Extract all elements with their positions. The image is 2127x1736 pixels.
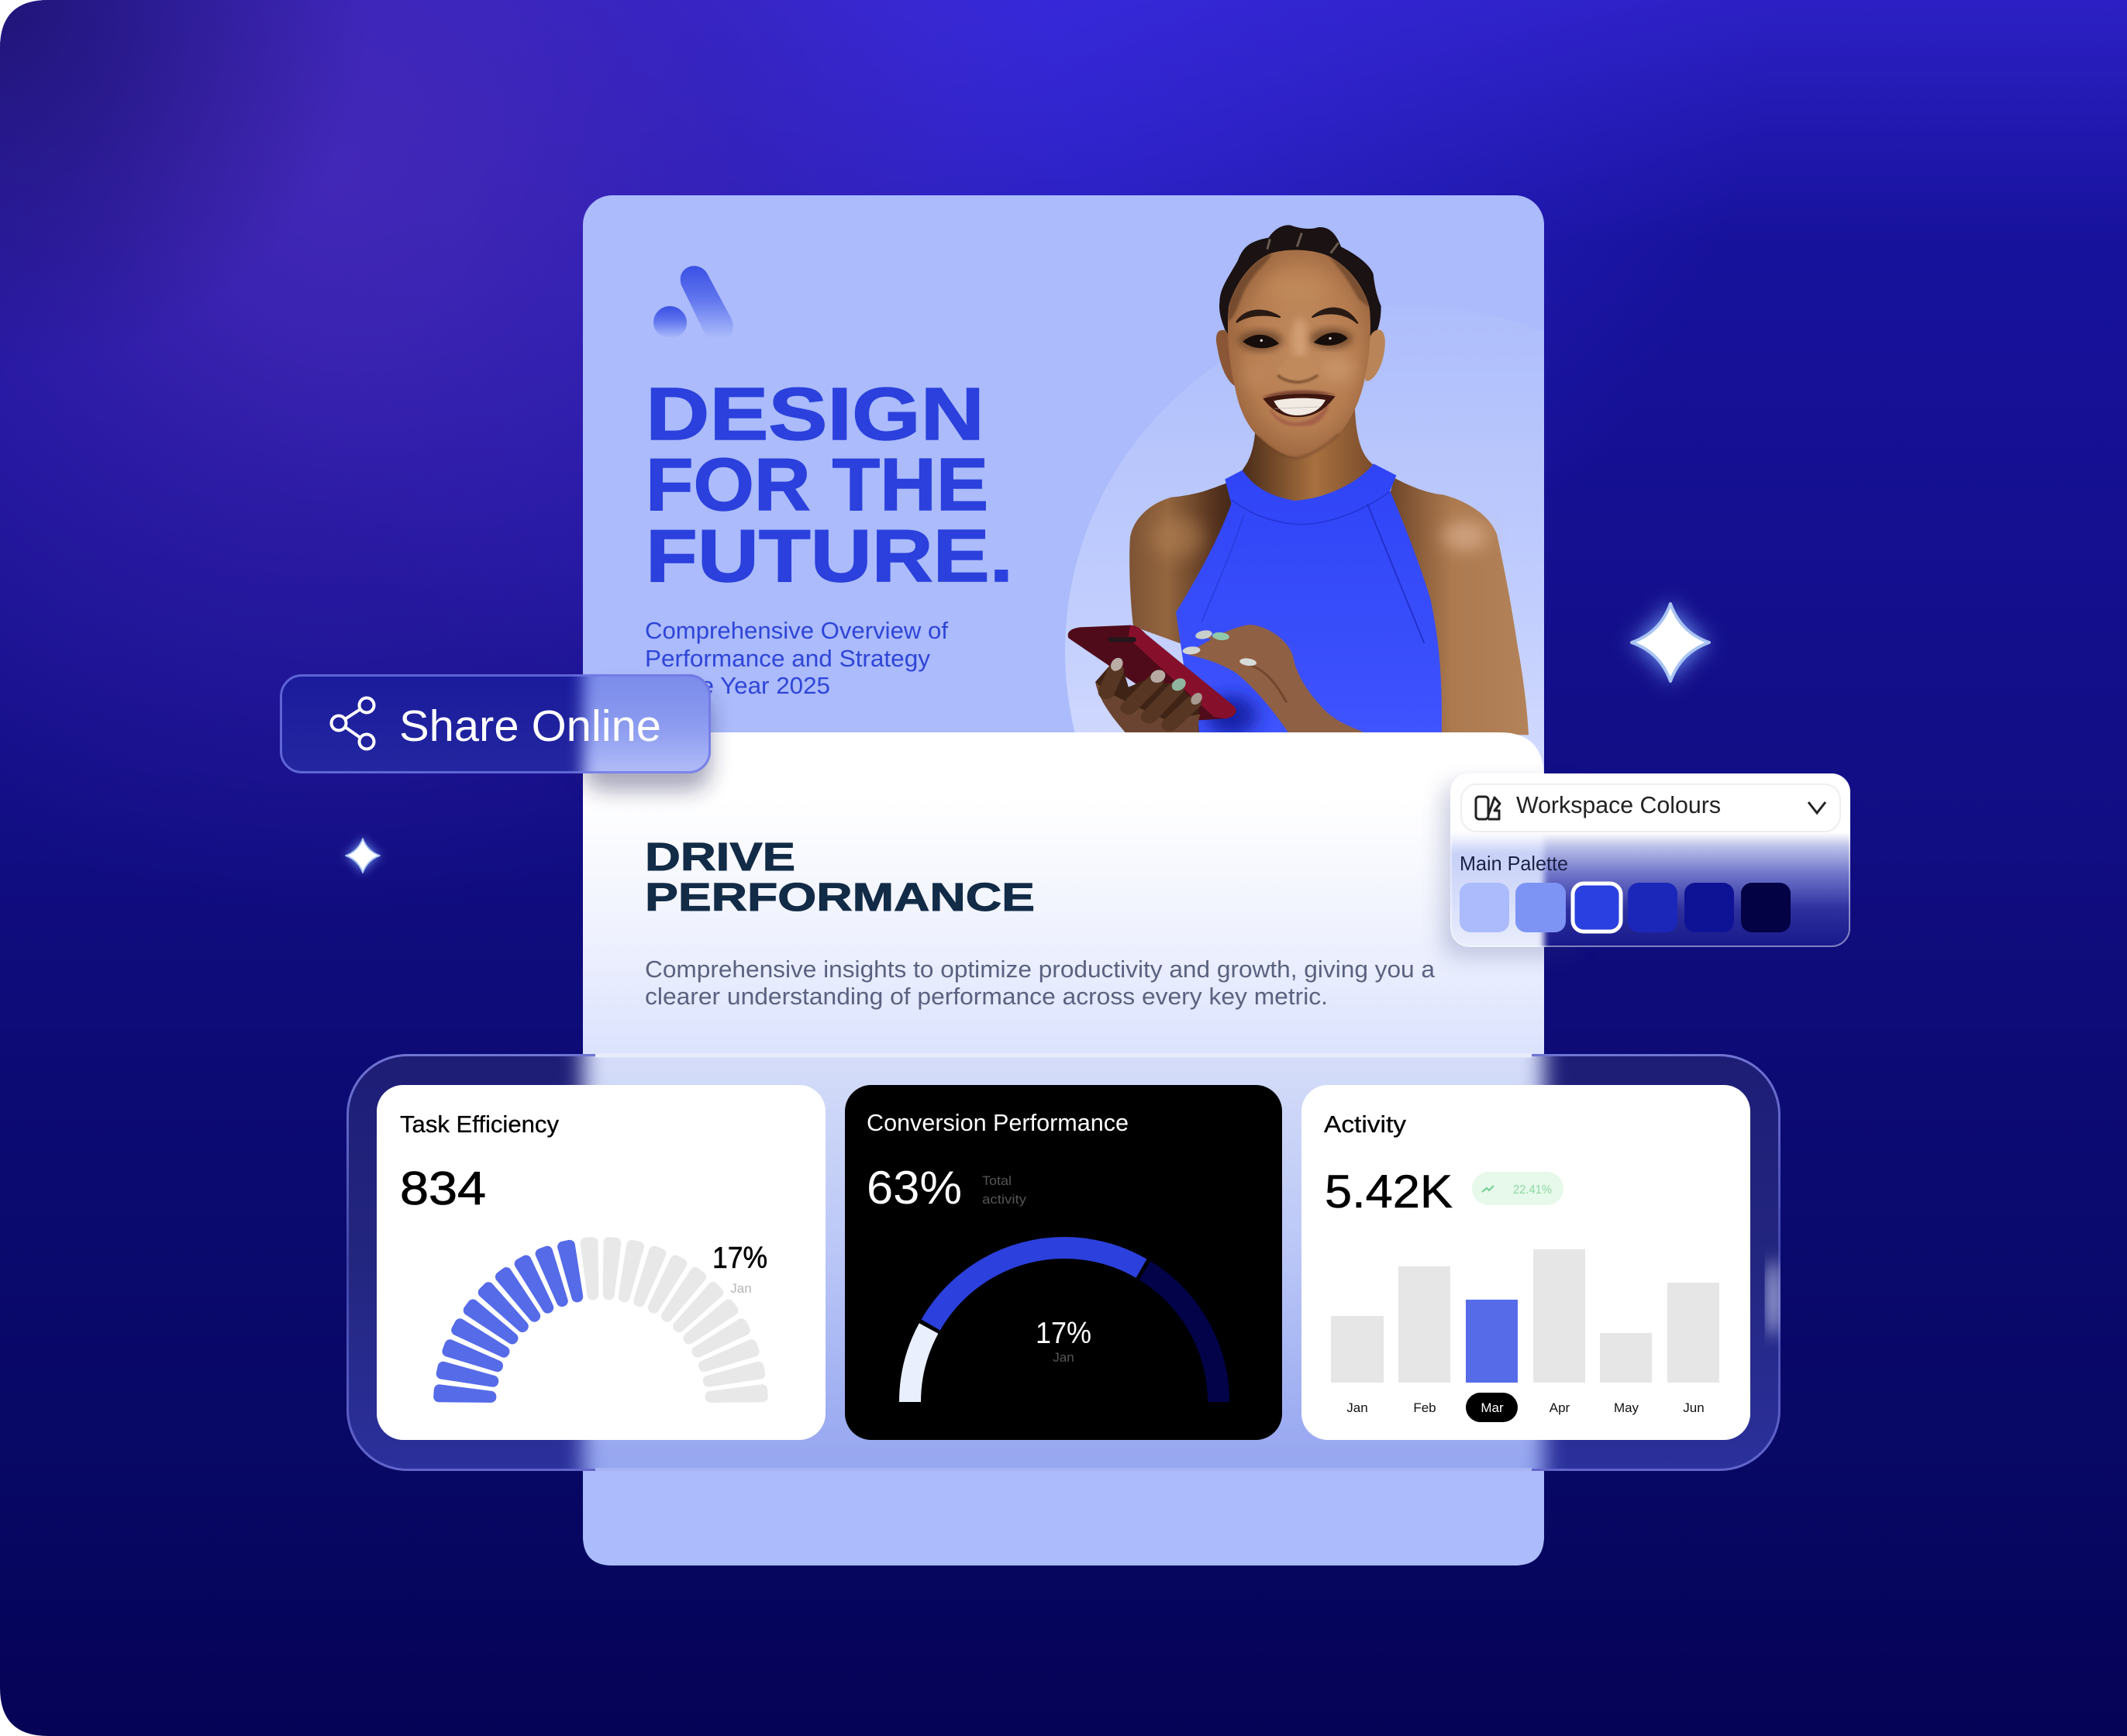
month labels: Jun bbox=[1683, 1400, 1705, 1415]
title: design for the future: FOR THE bbox=[646, 443, 988, 526]
gauge label: Jan bbox=[730, 1281, 752, 1296]
subtitle: for the Year 2025 bbox=[645, 672, 830, 699]
card title: Activity bbox=[1324, 1111, 1407, 1138]
heading: drive performance bbox=[645, 835, 1035, 919]
month labels: May bbox=[1614, 1400, 1639, 1415]
description paragraph: Comprehensive insights to optimize productivity and growth, giving you a bbox=[645, 956, 1436, 983]
month labels: Jan bbox=[1346, 1400, 1368, 1415]
month labels: Feb bbox=[1413, 1400, 1436, 1415]
bar chart bbox=[1331, 1249, 1719, 1383]
title: design for the future: DESIGN bbox=[646, 373, 984, 456]
title: design for the future: FUTURE. bbox=[646, 515, 1013, 598]
metric caption: Total bbox=[982, 1173, 1012, 1188]
share online button bbox=[280, 674, 725, 804]
hand holding phone bbox=[1095, 656, 1205, 735]
gauge label: Jan bbox=[1053, 1350, 1074, 1365]
dropdown bbox=[1461, 784, 1840, 832]
icon: small sparkle bbox=[345, 838, 381, 873]
gauge label bbox=[1036, 1317, 1091, 1365]
panel: task efficiency bbox=[377, 1085, 826, 1440]
metric caption: activity bbox=[982, 1192, 1027, 1207]
palette label: Main Palette bbox=[1460, 852, 1568, 875]
heading: drive performance: PERFORMANCE bbox=[645, 875, 1035, 919]
description paragraph bbox=[645, 956, 1436, 1010]
white content section bbox=[583, 732, 1544, 1566]
hair bbox=[1219, 226, 1381, 341]
colour swatches bbox=[1460, 883, 1791, 932]
gauge label bbox=[712, 1242, 767, 1296]
growth badge bbox=[1472, 1172, 1563, 1205]
dropdown: Workspace Colours bbox=[1516, 791, 1721, 818]
panel: glass dashboard bbox=[346, 1054, 1781, 1471]
month labels: Mar bbox=[1481, 1400, 1504, 1415]
icon: large sparkle bbox=[1630, 602, 1711, 683]
metric value: 5.42K bbox=[1325, 1166, 1453, 1218]
subtitle: Performance and Strategy bbox=[645, 645, 931, 672]
metric caption bbox=[982, 1173, 1027, 1207]
icon: palette bbox=[1476, 797, 1500, 819]
card hero background bbox=[583, 195, 1544, 1566]
person with phone bbox=[1068, 226, 1529, 736]
subtitle bbox=[645, 617, 948, 699]
body skin and arms bbox=[1129, 395, 1529, 735]
card title: Task Efficiency bbox=[400, 1111, 559, 1138]
icon: chevron bbox=[1808, 802, 1825, 813]
panel: report card bbox=[583, 195, 1544, 1566]
button label: Share Online bbox=[399, 701, 661, 751]
hand tapping bbox=[1182, 625, 1370, 735]
growth badge: 22.41% bbox=[1513, 1183, 1552, 1197]
card title: Conversion Performance bbox=[867, 1109, 1129, 1136]
icon: logo bbox=[653, 266, 733, 338]
panel: workspace colours bbox=[1426, 760, 1850, 961]
panel: activity bbox=[1301, 1085, 1750, 1440]
icon: share bbox=[332, 698, 374, 749]
face bbox=[1216, 250, 1385, 458]
icon: trend arrow bbox=[1482, 1186, 1494, 1192]
metric value: 63% bbox=[867, 1162, 962, 1214]
subtitle: Comprehensive Overview of bbox=[645, 617, 948, 644]
phone bbox=[1068, 625, 1236, 721]
radial tick gauge bbox=[439, 1242, 763, 1400]
gauge label: 17% bbox=[712, 1242, 767, 1275]
blue top bbox=[1176, 463, 1442, 736]
hero backdrop circle bbox=[1065, 384, 1544, 773]
semicircle gauge bbox=[910, 1248, 1219, 1402]
month labels: Apr bbox=[1550, 1400, 1570, 1415]
panel: conversion performance bbox=[845, 1085, 1282, 1440]
gauge label: 17% bbox=[1036, 1317, 1091, 1350]
heading: drive performance: DRIVE bbox=[645, 835, 795, 879]
metric value: 834 bbox=[400, 1162, 486, 1214]
description paragraph: clearer understanding of performance across every key metric. bbox=[645, 983, 1328, 1010]
title: design for the future bbox=[646, 373, 1013, 598]
month labels bbox=[1346, 1393, 1705, 1422]
glass tray bbox=[346, 1054, 1781, 1471]
